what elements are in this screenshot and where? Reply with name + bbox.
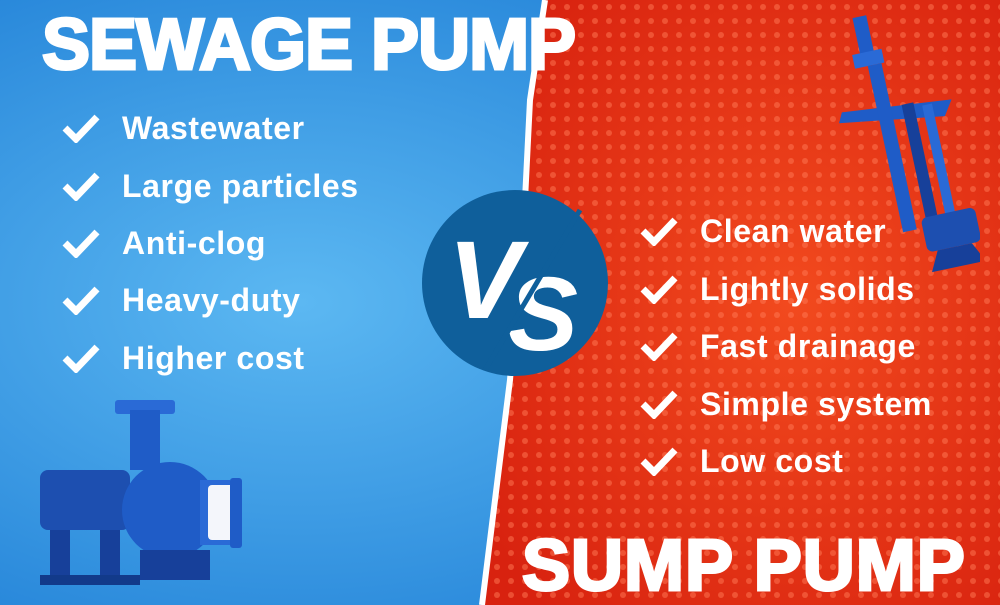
icon: vs badge: V bbox=[448, 219, 530, 342]
list: sump pump features: Simple system bbox=[700, 386, 932, 422]
title: sewage pump: SEWAGE PUMP bbox=[42, 5, 575, 85]
list: sump pump features: Clean water bbox=[700, 212, 886, 248]
list: sewage pump features bbox=[62, 110, 359, 376]
list: sump pump features: Fast drainage bbox=[700, 328, 916, 364]
list: sump pump features: Low cost bbox=[700, 442, 843, 478]
icon: sewage pump illustration bbox=[40, 400, 242, 585]
title: sump pump: SUMP PUMP bbox=[522, 526, 966, 605]
list: sump pump features: Lightly solids bbox=[700, 270, 915, 306]
list: sewage pump features: Higher cost bbox=[122, 340, 305, 376]
list: sewage pump features: Large particles bbox=[122, 168, 359, 204]
icon: vs badge bbox=[422, 190, 608, 376]
list: sewage pump features: Anti-clog bbox=[122, 224, 266, 260]
icon: sump pump illustration bbox=[839, 15, 980, 272]
list: sump pump features bbox=[640, 212, 932, 478]
list: sewage pump features: Heavy-duty bbox=[122, 282, 300, 318]
list: sewage pump features: Wastewater bbox=[122, 110, 305, 146]
icon: vs badge: S bbox=[508, 256, 578, 373]
